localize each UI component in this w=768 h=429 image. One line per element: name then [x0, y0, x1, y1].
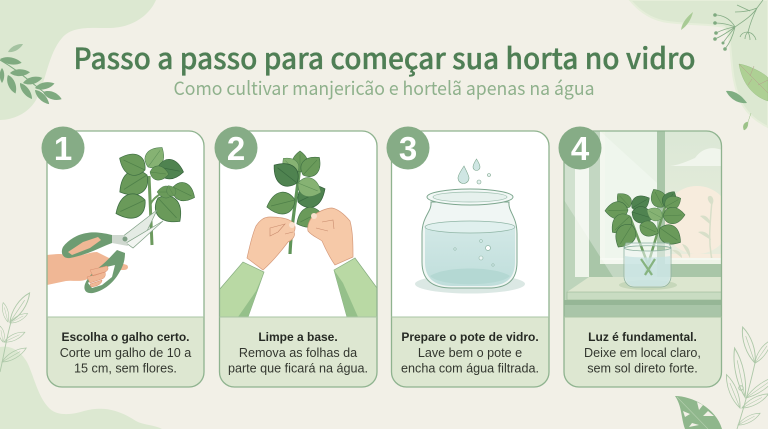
- subtitle: Como cultivar manjericão e hortelã apenas na água: [174, 75, 594, 101]
- number badge 1: [42, 126, 84, 170]
- sprig and leaves: top right: [681, 0, 768, 130]
- decorative blob: top right: [630, 0, 768, 127]
- caption area: [564, 317, 722, 387]
- caption text: encha com água filtrada.: [401, 362, 539, 376]
- caption text: Corte um galho de 10 a: [60, 346, 191, 360]
- panel: step 4: [558, 126, 731, 387]
- number badge 3: [386, 126, 430, 170]
- caption text: Deixe em local claro,: [584, 346, 701, 360]
- decorative blob: top left: [0, 0, 156, 120]
- caption text: Luz é fundamental.: [588, 330, 697, 344]
- panel: step 3: [386, 126, 549, 387]
- caption text: Escolha o galho certo.: [61, 330, 190, 344]
- illustration: hand with scissors cutting a stem: [47, 142, 199, 293]
- caption text: Remova as folhas da: [239, 346, 357, 360]
- decorative blob: bottom left: [0, 347, 162, 429]
- illustration: hands cleaning a stem: [219, 151, 377, 317]
- number badge 3: 3: [399, 130, 417, 167]
- caption text: parte que ficará na água.: [228, 362, 368, 376]
- number badge 2: 2: [227, 130, 245, 167]
- caption text: 15 cm, sem flores.: [74, 362, 177, 376]
- caption area: [392, 317, 549, 387]
- caption text: Lave bem o pote e: [418, 346, 522, 360]
- illustration: jar with herbs on a windowsill: [564, 131, 731, 317]
- monstera leaf: bottom right: [675, 396, 722, 429]
- number badge 2: [214, 126, 258, 170]
- title: Passo a passo para começar sua horta no vidro: [74, 36, 696, 78]
- panel: step 2: [214, 126, 377, 387]
- number badge 1: 1: [54, 130, 72, 167]
- illustration: water jar with drops: [415, 159, 525, 294]
- number badge 4: 4: [571, 130, 590, 167]
- caption area: [47, 317, 204, 387]
- number badge 4: [558, 126, 602, 170]
- caption text: Prepare o pote de vidro.: [401, 330, 539, 344]
- caption text: Limpe a base.: [258, 330, 338, 344]
- panel: step 1: [42, 126, 204, 387]
- sprig: top left: [0, 42, 63, 106]
- caption text: sem sol direto forte.: [587, 362, 698, 376]
- sprig: bottom left outline: [0, 291, 33, 372]
- sprig: bottom right outline: [723, 326, 768, 429]
- caption area: [220, 317, 377, 387]
